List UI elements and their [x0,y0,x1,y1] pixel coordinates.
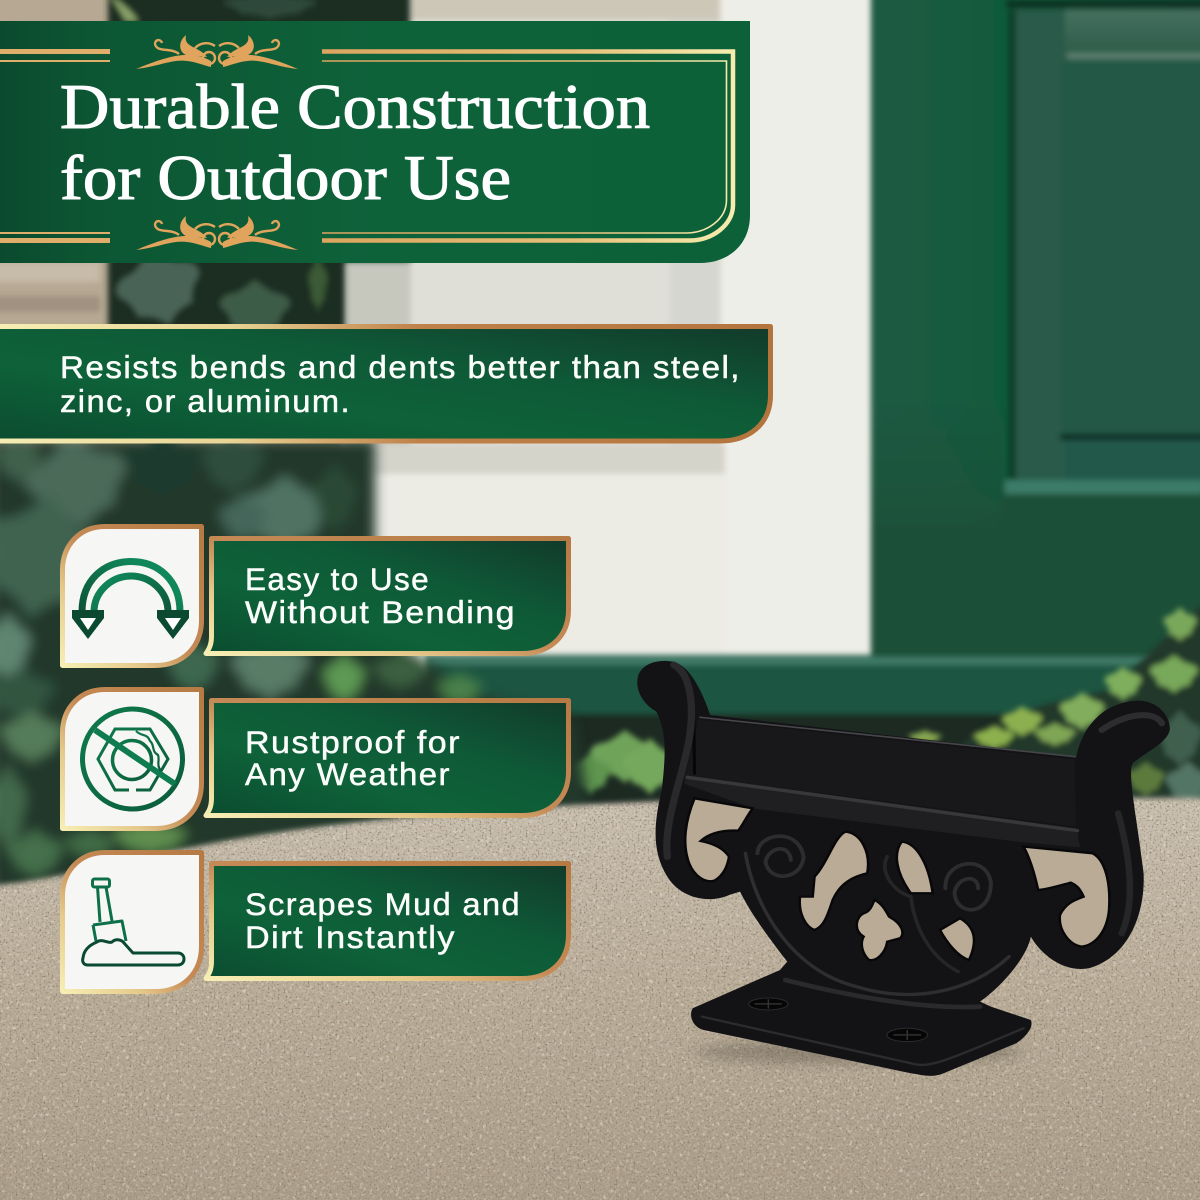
label text 3: Dirt Instantly [245,919,456,955]
label panel 3 [206,864,568,978]
icon tile 3 [62,852,202,992]
subheading text [60,349,741,419]
scraper bar face and relief highlights [667,665,1162,1065]
label text 1 [245,561,516,630]
banner gold frame lines [0,49,733,243]
ornament top [136,35,298,69]
door threshold [380,655,1200,809]
icon: no rust nut [82,709,182,809]
label text 2: Any Weather [245,756,451,792]
subheading banner [0,326,770,441]
door surround and white trim [340,0,880,680]
screw heads [749,998,928,1042]
feature 3: scrapes mud [62,852,568,992]
label text 3: Scrapes Mud and [245,886,521,922]
feature 2: rustproof [62,690,568,828]
label text 1: Easy to Use [245,561,430,597]
scraper openings [685,798,1109,960]
label panel 2 [206,700,568,816]
icon tile 2 [62,690,202,828]
stone wall [0,0,108,325]
label text 1: Without Bending [245,594,516,630]
title text [60,72,650,213]
label text 2: Rustproof for [245,724,461,760]
green front door [871,0,1200,670]
ivy foliage right [908,600,1200,810]
subheading text: Resists bends and dents better than steel, [60,349,741,385]
label text 2 [245,724,461,792]
ivy foliage upper [108,0,410,337]
label panel 1 [206,538,568,654]
scraper silhouette [637,661,1170,1076]
title text: for Outdoor Use [60,143,511,213]
label text 3 [245,886,521,955]
icon tile 1 [62,526,202,666]
subheading text: zinc, or aluminum. [60,383,351,419]
title text: Durable Construction [60,72,650,142]
title banner [0,21,750,263]
icon: shovel in dirt [83,879,184,965]
feature 1: easy to use [62,526,568,666]
ivy foliage lower [0,427,590,895]
ornament bottom [136,216,298,250]
concrete path [0,790,1200,1200]
icon: curved double arrow [72,562,189,639]
ivy by scraper [568,730,678,795]
product: black cast iron boot scraper [637,661,1170,1076]
